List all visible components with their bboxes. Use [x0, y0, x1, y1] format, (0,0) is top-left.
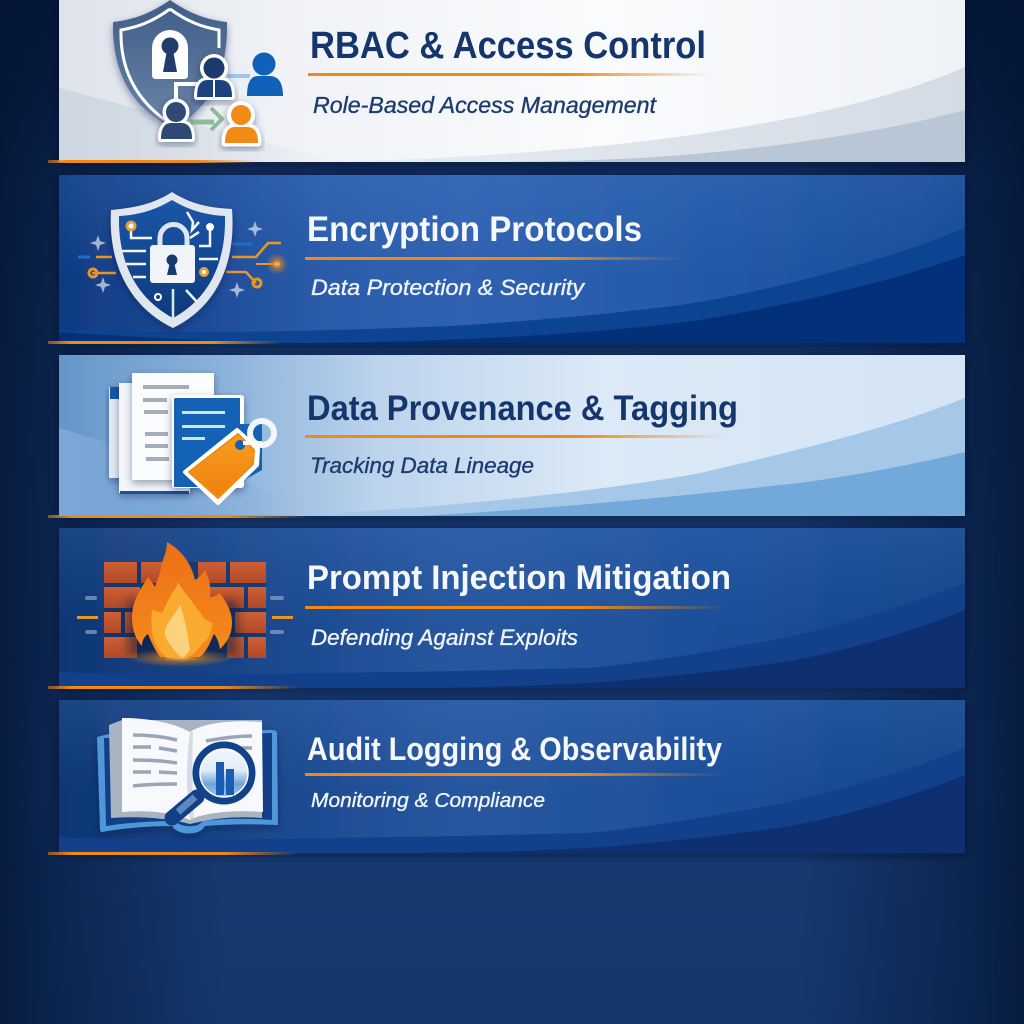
icon: sparkles — [90, 221, 263, 298]
icon: open book with magnifier — [97, 718, 278, 834]
heading: Data Provenance & Tagging — [307, 389, 738, 428]
ground glow — [125, 649, 235, 667]
heading: Prompt Injection Mitigation — [307, 559, 731, 597]
subtitle: Monitoring & Compliance — [311, 790, 545, 812]
orange rule — [308, 73, 712, 76]
subtitle: Defending Against Exploits — [311, 625, 578, 650]
orange edge line — [48, 341, 283, 344]
orange edge line — [48, 852, 298, 855]
heading: RBAC & Access Control — [310, 25, 706, 67]
orange rule — [305, 257, 683, 260]
heading: Encryption Protocols — [307, 210, 642, 249]
subtitle: Tracking Data Lineage — [310, 453, 534, 478]
icon: firewall with flame — [77, 542, 293, 667]
icon: slate user — [161, 98, 192, 139]
icon: orange user — [225, 101, 258, 143]
orange rule — [305, 773, 723, 776]
subtitle: Role-Based Access Management — [313, 92, 658, 118]
orange rule — [305, 606, 727, 609]
panel: Encryption Protocols — [48, 175, 965, 344]
orange edge line — [48, 686, 298, 689]
icon: shield with padlock — [78, 192, 288, 328]
panel: Audit Logging & Observability — [48, 700, 965, 855]
icon: documents with tag — [109, 373, 274, 503]
orange edge line — [48, 515, 308, 518]
icon: dark user — [197, 54, 232, 97]
subtitle: Data Protection & Security — [311, 275, 586, 300]
orange edge line — [48, 160, 258, 163]
icon: blue user — [247, 52, 283, 96]
panel: Prompt Injection Mitigation — [48, 528, 965, 689]
panel: RBAC & Access Control — [48, 0, 965, 163]
panel: Data Provenance & Tagging — [48, 355, 965, 518]
orange rule — [305, 435, 727, 438]
dark flame shadow — [128, 600, 238, 655]
icon: shield with users — [113, 0, 283, 143]
heading: Audit Logging & Observability — [307, 731, 722, 767]
